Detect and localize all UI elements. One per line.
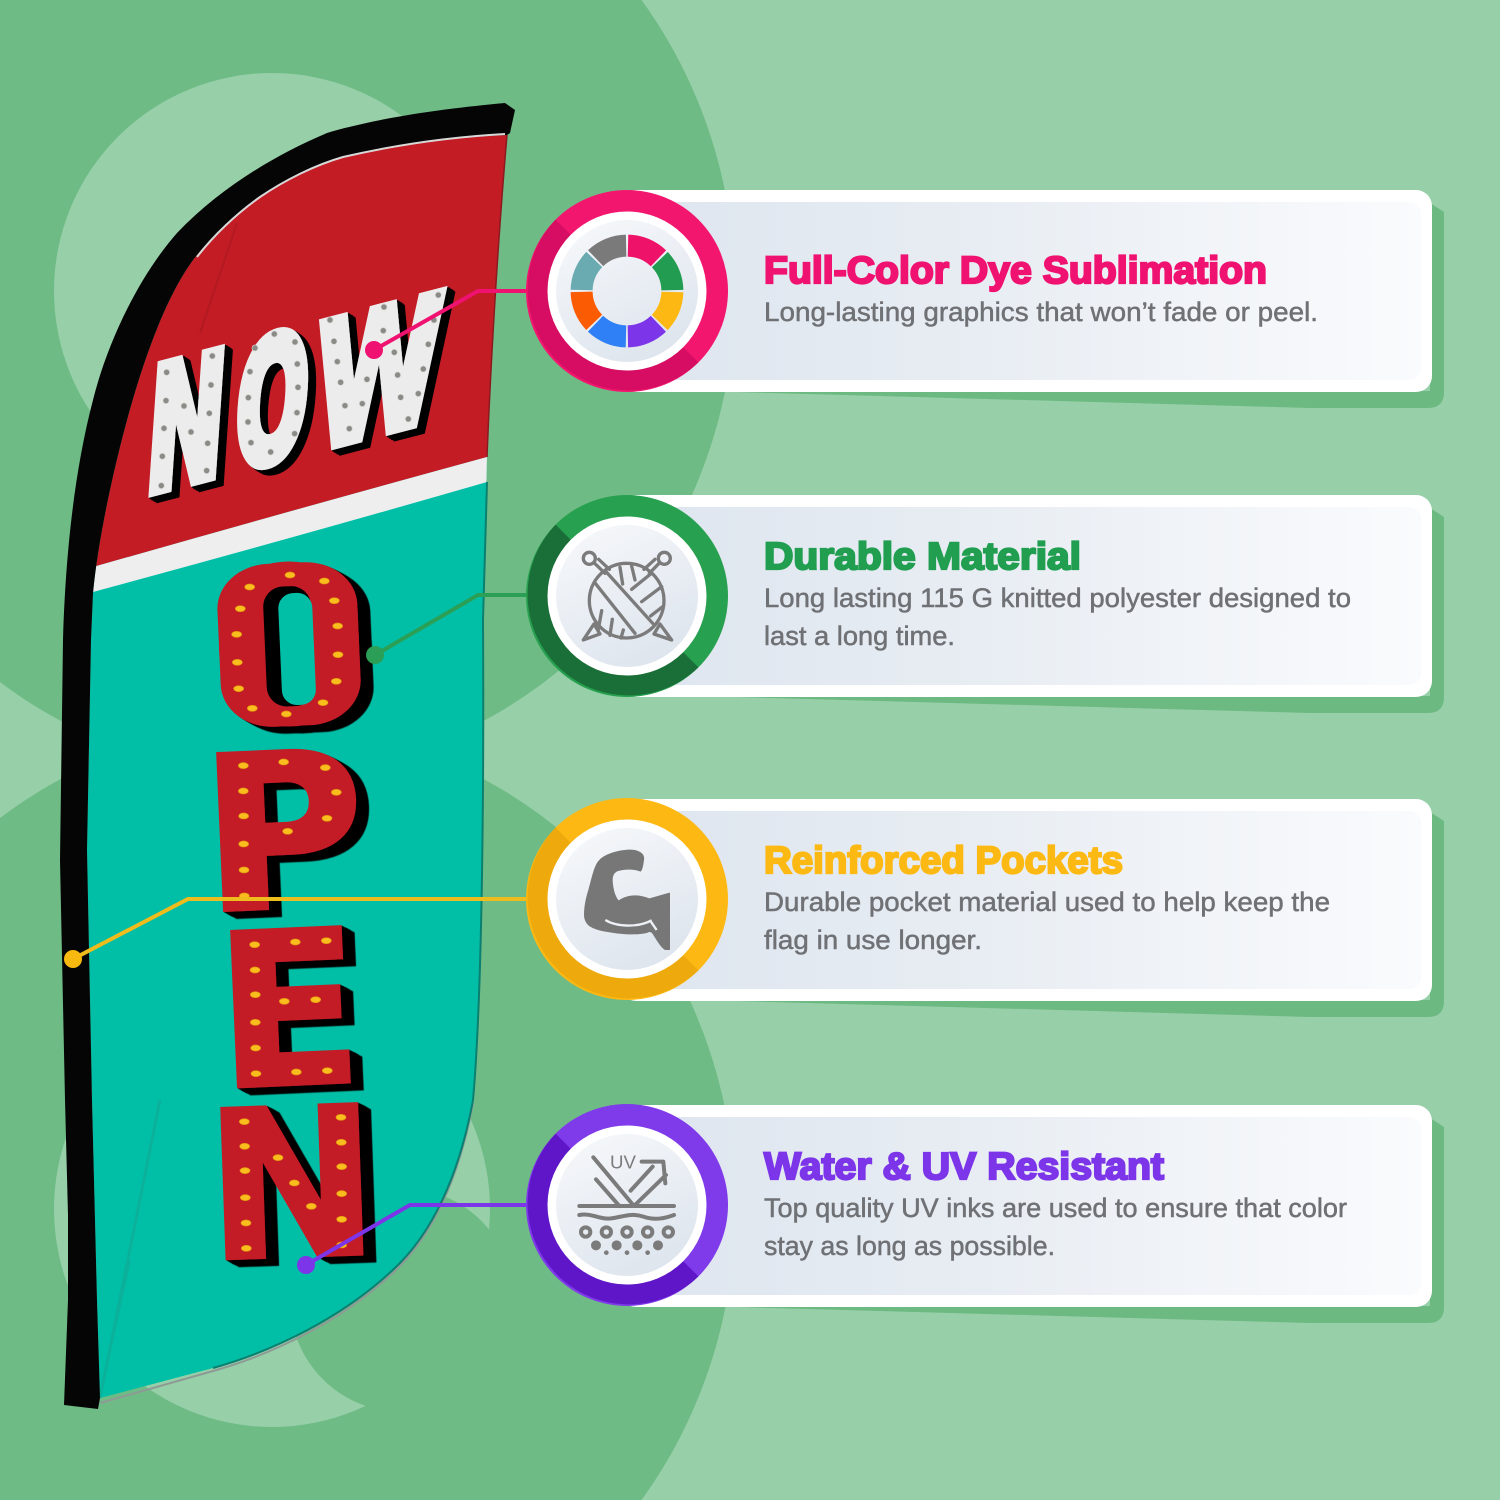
flag word: OPEN: O xyxy=(223,542,355,755)
card: Durable Material xyxy=(620,495,1432,697)
card: Water & UV Resistant xyxy=(620,1105,1432,1307)
OPEN lights: E and N xyxy=(239,938,347,1251)
icon: flexed arm xyxy=(584,850,670,950)
NOW rivets xyxy=(158,292,441,489)
card body: Long lasting 115 G knitted polyester designed to xyxy=(764,583,1351,613)
card heading: Durable Material xyxy=(764,536,1081,578)
flag xyxy=(60,100,520,1410)
badge: color wheel xyxy=(526,190,728,392)
badge: UV xyxy=(526,1104,728,1306)
connector: pink xyxy=(365,291,530,359)
connector: yellow xyxy=(64,899,530,968)
flag fabric xyxy=(87,135,506,1398)
card body xyxy=(764,887,1330,955)
icon: UV shield xyxy=(579,1152,674,1255)
flag word: NOW: O xyxy=(229,293,315,512)
flag word: OPEN: P xyxy=(196,706,370,962)
flag word: OPEN: N xyxy=(202,1064,382,1308)
flag bottom seam xyxy=(100,1103,473,1403)
card: Full-Color Dye Sublimation xyxy=(620,190,1432,392)
panel: card shadows xyxy=(700,203,1444,1323)
icon: yarn ball and needles xyxy=(583,552,672,640)
card body: last a long time. xyxy=(764,621,955,651)
badge: muscle xyxy=(526,798,728,1000)
flag word: NOW: N xyxy=(141,314,232,534)
card body: Durable pocket material used to help keep the xyxy=(764,887,1330,917)
card body xyxy=(764,1193,1347,1261)
card body: stay as long as possible. xyxy=(764,1231,1055,1261)
flag word: OPEN: E xyxy=(211,884,366,1137)
flag sleeve xyxy=(60,103,515,1409)
OPEN lights: O and P xyxy=(232,572,343,899)
card: Reinforced Pockets xyxy=(620,799,1432,1001)
connector: green xyxy=(366,595,530,664)
card heading: Water & UV Resistant xyxy=(764,1146,1164,1188)
icon: color wheel xyxy=(563,227,691,355)
card heading: Full-Color Dye Sublimation xyxy=(764,250,1267,292)
badge: knitting xyxy=(526,495,728,697)
sleeve white highlight xyxy=(197,134,505,257)
card body: flag in use longer. xyxy=(764,925,982,955)
flag word: OPEN xyxy=(196,542,382,1308)
card body: Long-lasting graphics that won’t fade or peel. xyxy=(764,297,1318,327)
flag word: NOW xyxy=(141,258,448,535)
hole of O xyxy=(262,585,317,707)
icon: UV shield: UV xyxy=(610,1152,636,1173)
card body: Top quality UV inks are used to ensure that color xyxy=(764,1193,1347,1223)
flag word: NOW: W xyxy=(309,259,448,490)
connector: purple xyxy=(297,1205,530,1274)
card body xyxy=(764,583,1351,651)
card heading: Reinforced Pockets xyxy=(764,840,1123,882)
